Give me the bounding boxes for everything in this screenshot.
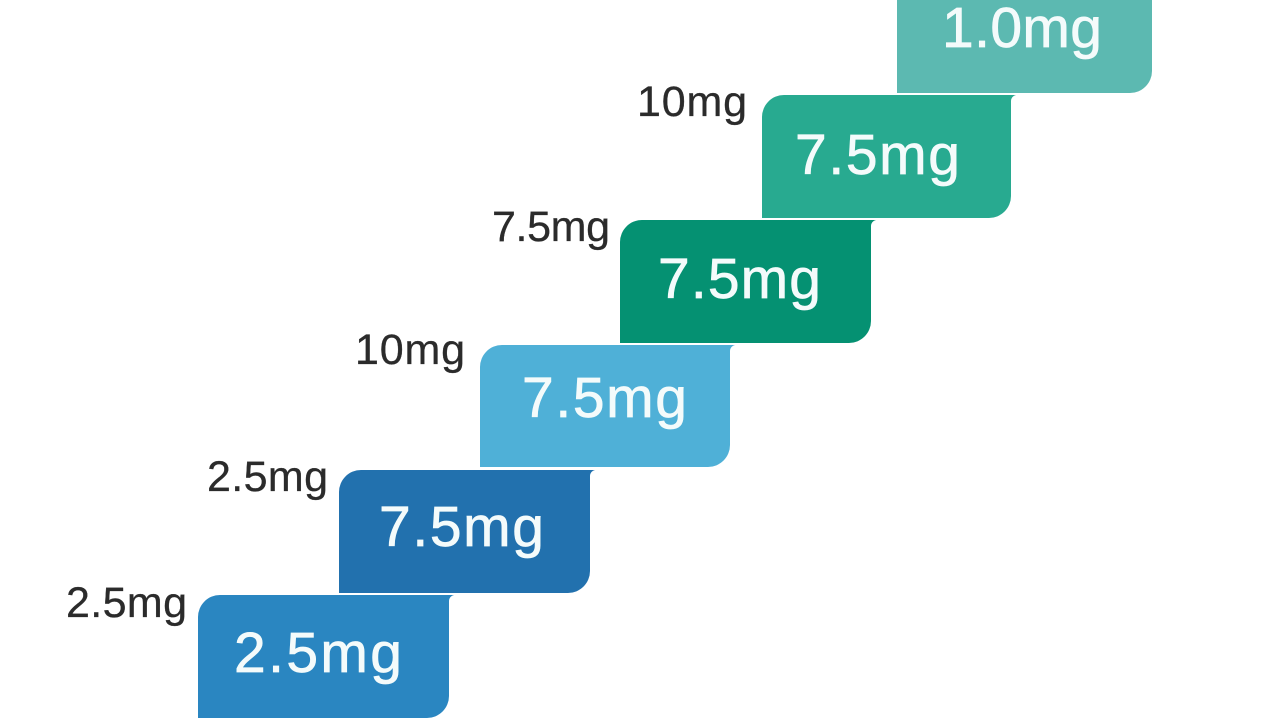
step 5: 10mg label and 7.5mg block: [637, 78, 1016, 218]
step 5: 10mg label and 7.5mg block: 7.5mg: [795, 123, 960, 187]
step 5: 10mg label and 7.5mg block: 10mg: [637, 78, 747, 126]
step 2: 2.5mg label and 7.5mg block: 7.5mg: [379, 495, 544, 559]
step 3: 10mg label and 7.5mg block: 7.5mg: [522, 366, 687, 430]
step 2: 2.5mg label and 7.5mg block: [207, 453, 595, 593]
step 4: 7.5mg label and 7.5mg block: 7.5mg: [658, 247, 821, 311]
step 4: 7.5mg label and 7.5mg block: [492, 203, 876, 343]
step 4: 7.5mg label and 7.5mg block: 7.5mg: [492, 203, 610, 251]
step 1: 2.5mg label and 2.5mg block: 2.5mg: [234, 621, 402, 685]
step 6: top 1.0mg: [897, 0, 1152, 93]
step 3: 10mg label and 7.5mg block: 10mg: [355, 326, 465, 374]
step 3: 10mg label and 7.5mg block: [355, 326, 735, 467]
step 1: 2.5mg label and 2.5mg block: 2.5mg: [66, 579, 187, 627]
step 2: 2.5mg label and 7.5mg block: 2.5mg: [207, 453, 328, 501]
step 1: 2.5mg label and 2.5mg block: [66, 579, 454, 718]
